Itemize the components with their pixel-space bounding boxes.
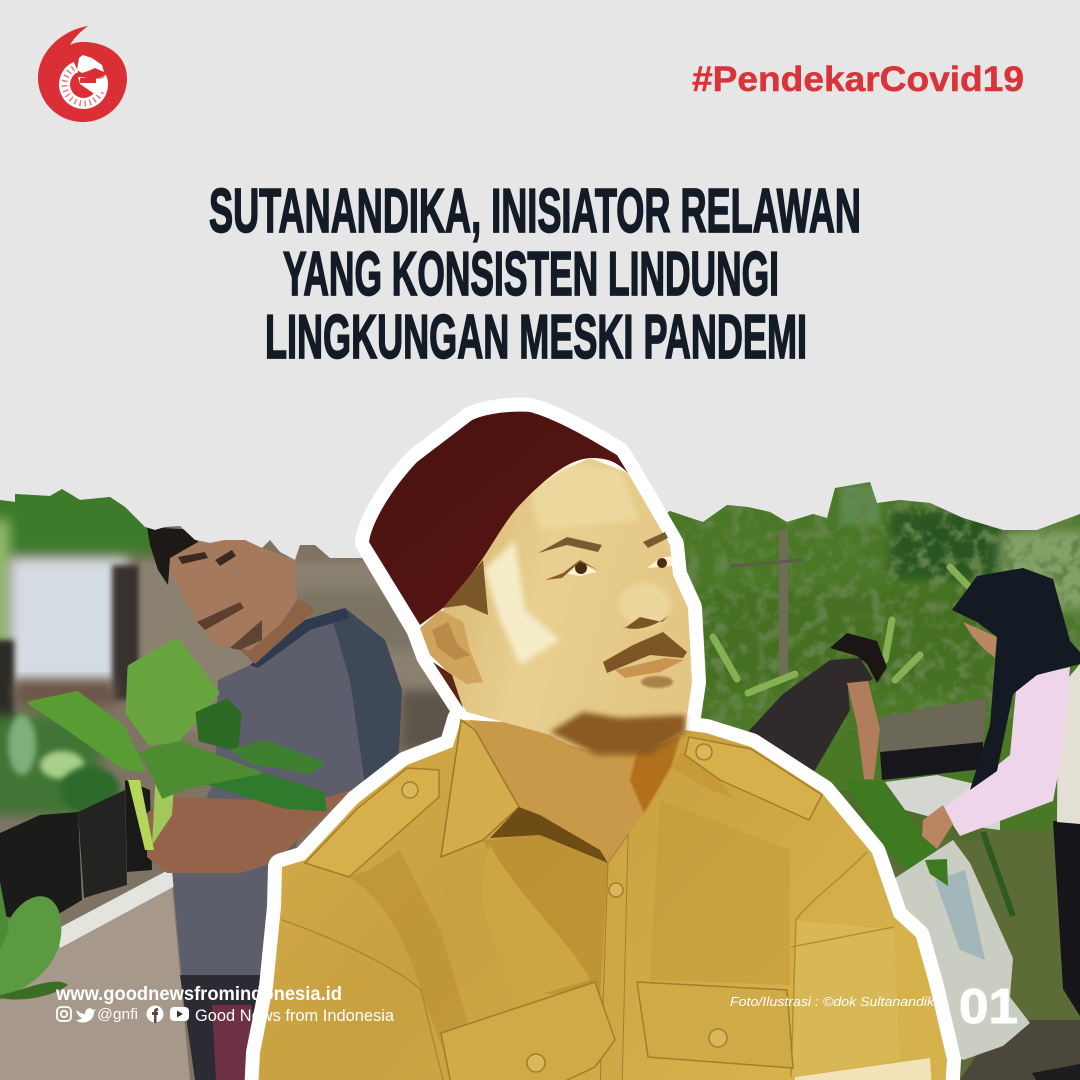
shoes — [1032, 1064, 1080, 1080]
icon: twitter — [76, 1008, 96, 1022]
bok choy plant — [30, 640, 325, 850]
eyes — [545, 556, 672, 580]
shirt — [258, 720, 947, 1080]
banana leaves — [713, 567, 972, 693]
cheek highlights — [484, 460, 640, 665]
icon: facebook — [146, 1006, 164, 1023]
website url: www.goodnewsfromindonesia.id — [55, 984, 342, 1005]
right collar — [671, 740, 733, 798]
face — [437, 458, 692, 753]
goatee — [550, 712, 685, 755]
page number: 01 — [959, 980, 1018, 1034]
left epaulette — [305, 768, 439, 877]
icon: youtube — [170, 1007, 189, 1021]
title — [209, 177, 861, 372]
photo: right garden scene — [667, 482, 1080, 1080]
portrait cutout: man with peci — [258, 412, 947, 1080]
utility pole — [730, 530, 803, 675]
white posts — [885, 775, 1000, 830]
eyebrows — [538, 532, 668, 553]
shirt shading — [349, 800, 900, 1077]
sack — [895, 840, 1030, 1060]
foreground leaf — [0, 882, 68, 999]
chin tuft — [641, 676, 673, 688]
left collar — [441, 720, 608, 863]
icon: instagram — [57, 1007, 71, 1021]
placket — [600, 835, 628, 1080]
right pocket — [637, 982, 793, 1068]
moustache and lips — [603, 632, 687, 678]
buttons — [402, 744, 727, 1072]
neck — [470, 720, 680, 863]
nose — [619, 583, 671, 629]
long leaf — [983, 832, 1013, 916]
photo credit: Foto/Ilustrasi : ©dok Sultanandika — [730, 994, 942, 1009]
hashtag: #PendekarCovid19 — [692, 60, 1024, 99]
ear — [420, 610, 483, 684]
social row — [57, 1006, 395, 1025]
sideburn — [443, 560, 488, 615]
white sticker outline — [258, 412, 947, 1080]
gardener body — [147, 527, 402, 1080]
logo — [38, 26, 127, 122]
grass ground — [880, 830, 1080, 1080]
foliage texture — [668, 482, 1080, 730]
skin of forearm — [795, 1058, 932, 1080]
photo: left gardener scene — [0, 480, 480, 1080]
stone wall — [880, 698, 987, 752]
cut greenery heap — [844, 778, 938, 870]
seedling pots — [0, 715, 152, 925]
woman — [922, 568, 1080, 1016]
left pocket — [441, 982, 615, 1080]
sleeve seams — [282, 852, 894, 1080]
channel name: Good News from Indonesia — [195, 1006, 395, 1025]
handle: @gnfi — [97, 1006, 138, 1023]
right epaulette — [685, 737, 822, 820]
peci hat — [369, 412, 628, 625]
black rail — [880, 742, 983, 780]
boy bending — [745, 633, 887, 790]
concrete ledge — [0, 868, 190, 1080]
hair behind ear — [433, 662, 463, 708]
gardener arm and hand — [147, 790, 353, 873]
